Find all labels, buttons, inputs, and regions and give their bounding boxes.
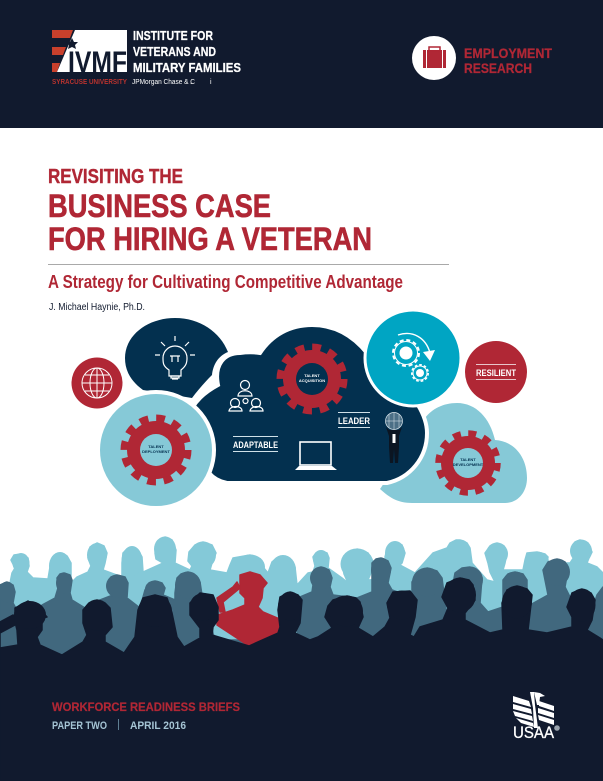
gear: talent deployment: DEPLOYMENT: [142, 449, 170, 454]
label: leader: LEADER: [338, 416, 370, 426]
icon: laptop: [295, 442, 337, 470]
icon: light bulb: [155, 336, 195, 379]
employment research label: [464, 46, 553, 76]
front row: dark crowd: [0, 578, 603, 781]
USAA logo: [513, 692, 560, 742]
IVMF logo: SYRACUSE UNIVERSITY: [52, 77, 127, 86]
label: leader: [338, 412, 370, 428]
label: adaptable: [233, 436, 278, 452]
icon: turning gears: [393, 334, 435, 381]
saluting soldier in red: [217, 572, 282, 646]
footer label: paper and date: APRIL 2016: [130, 720, 186, 732]
footer label: workforce readiness briefs: WORKFORCE READINESS BRIEFS: [52, 702, 240, 714]
header band: [0, 0, 603, 128]
gear: talent deployment: TALENT: [148, 444, 164, 449]
title: BUSINESS CASE: [48, 188, 271, 224]
gear: talent acquisition: [280, 347, 344, 411]
light cloud: talent development: [380, 403, 527, 503]
IVMF logo: IVMF: [68, 46, 127, 79]
title: [48, 166, 372, 257]
gear: talent development: [438, 434, 498, 492]
footer label: paper and date: [52, 719, 186, 732]
icon: figure holding globe: [386, 412, 402, 463]
employment research label: EMPLOYMENT: [464, 46, 553, 61]
footer label: paper and date: PAPER TWO: [52, 720, 107, 732]
icon: briefcase badge: [412, 36, 456, 80]
IVMF logo: [52, 28, 241, 86]
IVMF logo: MILITARY FAMILIES: [133, 60, 241, 75]
label: adaptable: ADAPTABLE: [233, 440, 278, 450]
bulb cloud: [125, 318, 228, 398]
resilient badge: [465, 341, 527, 403]
gear: talent development: DEVELOPMENT: [453, 462, 484, 467]
employment research label: RESEARCH: [464, 61, 532, 76]
title: REVISITING THE: [48, 166, 183, 188]
back row: light blue crowd: [10, 536, 603, 640]
IVMF logo: VETERANS AND: [133, 44, 216, 59]
teal circle with gears icon: [365, 310, 461, 406]
IVMF logo: JPMorgan Chase & C: [132, 79, 195, 86]
gear: talent deployment: [124, 418, 188, 482]
subtitle: A Strategy for Cultivating Competitive Advantage: [48, 272, 403, 292]
title: FOR HIRING A VETERAN: [48, 221, 372, 257]
crowd silhouettes: [0, 536, 603, 781]
light circle with talent deployment gear: [98, 392, 214, 508]
middle row: slate crowd: [0, 558, 603, 660]
IVMF logo: INSTITUTE FOR: [133, 28, 213, 43]
USAA logo: USAA: [513, 723, 555, 742]
author: J. Michael Haynie, Ph.D.: [49, 302, 145, 313]
globe badge: [72, 358, 122, 408]
gear: talent acquisition: TALENT: [304, 373, 320, 378]
IVMF logo: .: [190, 79, 192, 86]
main navy cloud: [185, 325, 427, 483]
IVMF logo: i: [210, 79, 212, 86]
gear: talent acquisition: ACQUISITION: [299, 378, 325, 383]
gear: talent development: TALENT: [460, 457, 476, 462]
icon: people network: [229, 380, 263, 411]
resilient badge: RESILIENT: [476, 368, 516, 378]
